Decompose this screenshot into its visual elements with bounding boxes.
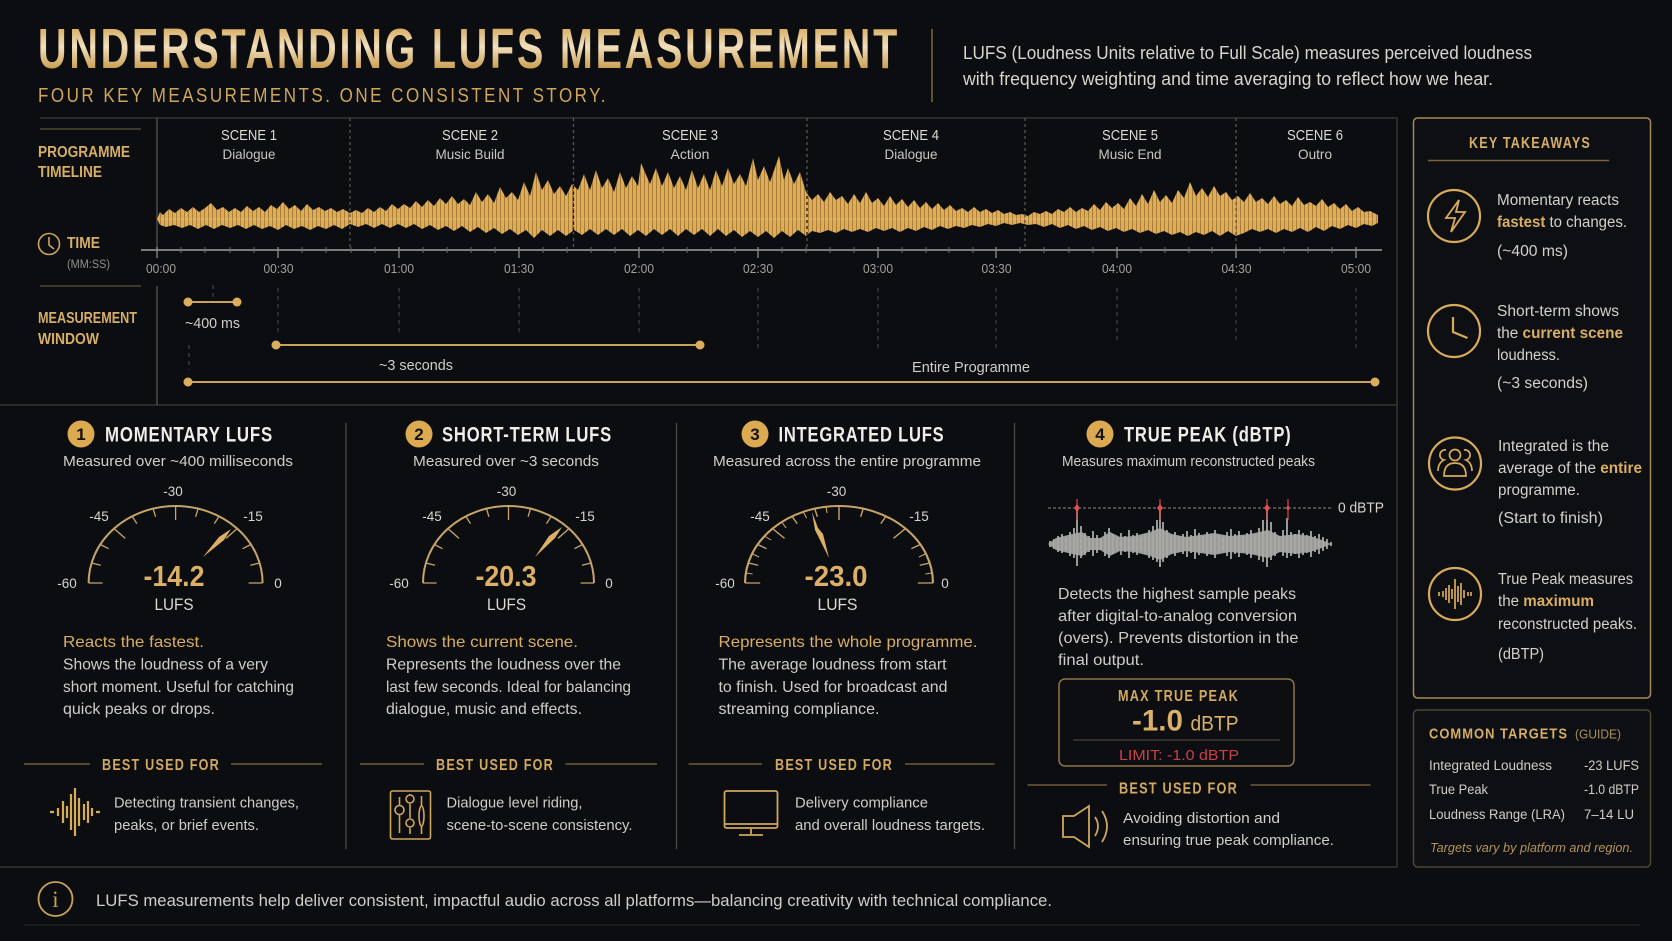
icon: speaker xyxy=(1063,806,1107,847)
takeaways heading: KEY TAKEAWAYS xyxy=(1469,135,1591,152)
gauge: -60 xyxy=(389,576,409,591)
description xyxy=(63,634,294,718)
panel: true peak xyxy=(1028,420,1384,849)
intro text: with frequency weighting and time averaging to reflect how we hear. xyxy=(962,69,1493,89)
best used for: BEST USED FOR xyxy=(436,757,554,774)
gauge: -20.3 xyxy=(476,561,536,593)
description: final output. xyxy=(1058,652,1144,669)
scene labels: Dialogue xyxy=(884,146,938,162)
heading: Measured over ~3 seconds xyxy=(413,453,599,470)
heading: Measures maximum reconstructed peaks xyxy=(1062,453,1315,470)
window: 3 seconds: ~3 seconds xyxy=(379,357,453,374)
use text: Avoiding distortion and xyxy=(1123,810,1280,827)
takeaway: integrated: programme. xyxy=(1498,482,1580,499)
heading xyxy=(713,420,981,470)
panel: common targets xyxy=(1414,710,1650,867)
scene labels: SCENE 3 xyxy=(662,128,718,144)
takeaway: short-term: (~3 seconds) xyxy=(1497,375,1588,392)
time labels: 04:00 xyxy=(1102,262,1132,276)
scene labels: Action xyxy=(670,146,710,162)
panel: programme timeline xyxy=(38,118,1382,276)
measurement label xyxy=(38,286,141,348)
gauge: -30 xyxy=(497,484,516,499)
time labels: 03:30 xyxy=(982,262,1012,276)
takeaway: integrated xyxy=(1429,438,1642,527)
scene labels: SCENE 2 xyxy=(442,128,498,144)
description: Reacts the fastest. xyxy=(63,634,204,651)
panel: measurement window xyxy=(38,285,1380,386)
window: entire programme xyxy=(184,359,1380,386)
panel: short-term LUFS xyxy=(360,420,657,839)
takeaway: integrated: Integrated is the xyxy=(1498,438,1609,455)
gauge: -30 xyxy=(827,484,846,499)
takeaway: true peak: the maximum xyxy=(1498,593,1594,610)
heading: SHORT-TERM LUFS xyxy=(442,424,612,446)
heading: INTEGRATED LUFS xyxy=(778,424,944,446)
description: Detects the highest sample peaks xyxy=(1058,586,1296,603)
time labels: 01:30 xyxy=(504,262,534,276)
scene labels xyxy=(221,128,1343,162)
gauge: -45 xyxy=(750,509,770,524)
use text: Delivery compliance xyxy=(795,794,928,812)
measurement label: WINDOW xyxy=(38,331,99,348)
time labels: 00:30 xyxy=(264,262,294,276)
gauge xyxy=(715,484,949,614)
scene labels: Outro xyxy=(1298,146,1332,162)
takeaway: momentary: (~400 ms) xyxy=(1497,243,1568,260)
scene labels: SCENE 6 xyxy=(1287,128,1343,144)
time labels: 04:30 xyxy=(1222,262,1252,276)
header divider xyxy=(931,29,933,102)
targets table: -1.0 dBTP xyxy=(1584,782,1639,797)
takeaway: momentary: Momentary reacts xyxy=(1497,192,1619,209)
waveform xyxy=(157,156,1378,238)
time labels: 03:00 xyxy=(863,262,893,276)
icon: waveform xyxy=(50,788,100,836)
gauge: 0 xyxy=(274,576,282,591)
description xyxy=(386,634,631,718)
window: 3 seconds xyxy=(272,340,704,374)
gauge: -30 xyxy=(163,484,183,499)
time axis xyxy=(141,247,1382,258)
use text xyxy=(1123,810,1334,849)
takeaway: true peak: True Peak measures xyxy=(1498,571,1633,588)
takeaway: short-term: the current scene xyxy=(1497,325,1623,342)
gauge: LUFS xyxy=(818,595,858,614)
gauge: -60 xyxy=(57,576,77,591)
best used for: BEST USED FOR xyxy=(102,757,220,774)
chart: true peak waveform xyxy=(1048,499,1384,567)
description: quick peaks or drops. xyxy=(63,701,215,718)
icon: info: i xyxy=(52,887,59,912)
scene labels: Dialogue xyxy=(222,146,276,162)
targets table: Integrated Loudness xyxy=(1429,758,1552,773)
time labels: 05:00 xyxy=(1341,262,1371,276)
use text xyxy=(795,794,985,834)
gauge: 0 xyxy=(605,576,613,591)
title: UNDERSTANDING LUFS MEASUREMENT xyxy=(38,17,900,81)
description: Represents the whole programme. xyxy=(718,634,978,651)
time labels: 02:30 xyxy=(743,262,773,276)
gauge: -14.2 xyxy=(144,561,204,593)
panel: integrated LUFS xyxy=(688,420,994,835)
targets table xyxy=(1429,758,1639,822)
takeaway: momentary: fastest to changes. xyxy=(1497,214,1627,231)
takeaway: true peak: reconstructed peaks. xyxy=(1498,616,1637,633)
description: after digital-to-analog conversion xyxy=(1058,608,1297,625)
description xyxy=(718,634,978,718)
use text xyxy=(446,794,632,834)
gauge: -15 xyxy=(243,509,263,524)
time label xyxy=(67,235,110,271)
heading xyxy=(1062,420,1315,470)
use text: scene-to-scene consistency. xyxy=(446,817,632,834)
takeaway: momentary xyxy=(1428,190,1627,260)
heading: 1 xyxy=(76,425,86,444)
gauge: -15 xyxy=(909,509,929,524)
time labels: 00:00 xyxy=(146,262,176,276)
scene labels: Music End xyxy=(1098,146,1162,162)
gauge: -15 xyxy=(575,509,595,524)
intro text xyxy=(962,43,1532,89)
time labels xyxy=(146,262,1371,276)
description xyxy=(1058,586,1299,669)
description: short moment. Useful for catching xyxy=(63,679,294,696)
timeline label: TIMELINE xyxy=(38,164,102,181)
description: streaming compliance. xyxy=(718,701,880,718)
description: dialogue, music and effects. xyxy=(386,701,582,718)
scene dividers xyxy=(350,118,1236,250)
gauge: -45 xyxy=(89,509,109,524)
heading: 3 xyxy=(750,425,760,444)
targets note: Targets vary by platform and region. xyxy=(1430,841,1633,855)
icon: info xyxy=(38,882,72,916)
intro text: LUFS (Loudness Units relative to Full Scale) measures perceived loudness xyxy=(963,43,1532,63)
description: Represents the loudness over the xyxy=(386,656,621,674)
takeaway: short-term: loudness. xyxy=(1497,347,1560,364)
targets table: 7–14 LU xyxy=(1584,807,1634,822)
description: Shows the loudness of a very xyxy=(63,656,268,674)
targets heading: (GUIDE) xyxy=(1575,728,1621,742)
heading: MOMENTARY LUFS xyxy=(105,424,273,446)
heading: Measured over ~400 milliseconds xyxy=(63,453,293,470)
takeaway: integrated: average of the entire xyxy=(1498,460,1642,477)
description: Shows the current scene. xyxy=(386,634,578,651)
callout: max true peak: LIMIT: -1.0 dBTP xyxy=(1119,747,1239,764)
window: entire programme: Entire Programme xyxy=(912,359,1030,376)
time label: (MM:SS) xyxy=(67,259,110,271)
gauge: -60 xyxy=(715,576,735,591)
takeaway: true peak: (dBTP) xyxy=(1498,646,1544,663)
use text xyxy=(114,794,299,834)
targets heading: COMMON TARGETS xyxy=(1429,726,1568,742)
measurement label: MEASUREMENT xyxy=(38,310,137,327)
targets table: True Peak xyxy=(1429,782,1488,797)
description: The average loudness from start xyxy=(718,656,947,674)
heading: Measured across the entire programme xyxy=(713,453,981,470)
icon: mixer xyxy=(390,791,430,839)
column dividers xyxy=(346,423,1014,849)
scene labels: Music Build xyxy=(436,146,504,162)
callout: max true peak: dBTP xyxy=(1190,712,1238,736)
callout: max true peak xyxy=(1059,679,1294,766)
callout: max true peak: -1.0 xyxy=(1132,704,1183,738)
description: to finish. Used for broadcast and xyxy=(718,679,948,696)
use text: ensuring true peak compliance. xyxy=(1123,832,1334,849)
description: (overs). Prevents distortion in the xyxy=(1058,630,1299,647)
scene labels: SCENE 4 xyxy=(883,128,939,144)
gauge: LUFS xyxy=(154,595,194,614)
best used for: BEST USED FOR xyxy=(1119,780,1238,798)
chart: true peak waveform: 0 dBTP xyxy=(1338,500,1384,516)
description: last few seconds. Ideal for balancing xyxy=(386,679,631,696)
window: 400 ms xyxy=(184,298,242,332)
guide lines xyxy=(189,285,1356,370)
window: 400 ms: ~400 ms xyxy=(185,315,240,332)
use text: Detecting transient changes, xyxy=(114,794,299,812)
time labels: 01:00 xyxy=(384,262,414,276)
gauge xyxy=(57,484,282,614)
icon: monitor xyxy=(724,791,778,835)
use text: peaks, or brief events. xyxy=(114,817,259,834)
scene labels: SCENE 5 xyxy=(1102,128,1158,144)
icon: clock xyxy=(38,234,60,254)
targets table: -23 LUFS xyxy=(1584,758,1639,773)
heading xyxy=(63,420,293,470)
footer text: LUFS measurements help deliver consistent, impactful audio across all platforms—balancing creativity with technical compliance. xyxy=(96,891,1052,910)
panel: key takeaways xyxy=(1414,118,1650,698)
scene labels: SCENE 1 xyxy=(221,128,277,144)
time label: TIME xyxy=(67,235,100,252)
takeaway: short-term xyxy=(1428,303,1623,392)
use text: Dialogue level riding, xyxy=(446,794,582,812)
heading: 2 xyxy=(414,425,424,444)
time labels: 02:00 xyxy=(624,262,654,276)
gauge: 0 xyxy=(941,576,949,591)
footer note xyxy=(38,882,1052,916)
gauge: -23.0 xyxy=(804,561,868,593)
use text: and overall loudness targets. xyxy=(795,817,985,834)
callout: max true peak: MAX TRUE PEAK xyxy=(1118,688,1239,705)
takeaway: true peak xyxy=(1429,568,1637,663)
heading: TRUE PEAK (dBTP) xyxy=(1124,424,1292,446)
heading xyxy=(406,420,612,470)
panel: momentary LUFS xyxy=(24,420,322,836)
takeaway: integrated: (Start to finish) xyxy=(1498,510,1603,527)
subtitle: FOUR KEY MEASUREMENTS. ONE CONSISTENT STORY. xyxy=(38,84,608,107)
targets table: Loudness Range (LRA) xyxy=(1429,807,1565,822)
best used for: BEST USED FOR xyxy=(775,757,893,774)
timeline label xyxy=(38,129,141,181)
takeaway: short-term: Short-term shows xyxy=(1497,303,1619,320)
timeline label: PROGRAMME xyxy=(38,144,130,161)
heading: 4 xyxy=(1095,425,1105,444)
gauge xyxy=(389,484,613,614)
gauge: -45 xyxy=(422,509,442,524)
gauge: LUFS xyxy=(487,595,526,614)
